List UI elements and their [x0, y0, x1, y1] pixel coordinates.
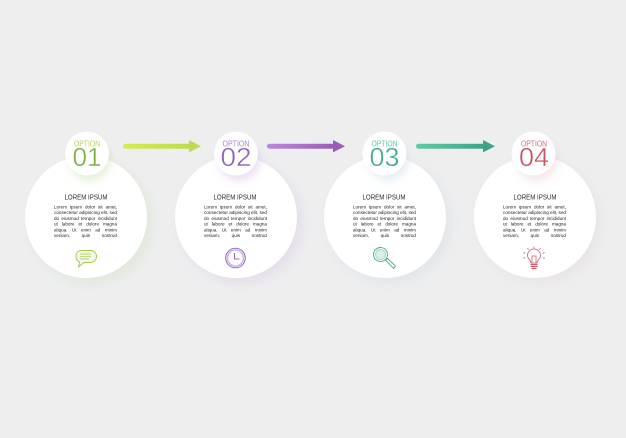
arrow: option 2 to option 3	[267, 140, 345, 152]
text block: option 2: do eiusmod tempor incididunt	[204, 216, 268, 221]
badge: option 1: 01	[72, 144, 102, 172]
text block: option 3	[353, 204, 417, 238]
badge: option 1	[65, 132, 109, 176]
badge: option 3: 03	[370, 144, 400, 172]
badge: option 2	[214, 132, 258, 176]
heading: option 4: LOREM IPSUM	[514, 194, 557, 202]
icon: speech bubble	[76, 250, 97, 267]
text block: option 1	[54, 204, 118, 238]
heading: option 1: LOREM IPSUM	[64, 194, 108, 202]
text block: option 3: ut labore et dolore magna	[353, 222, 416, 227]
icon: clock	[226, 248, 245, 268]
text block: option 1: ut labore et dolore magna	[54, 222, 117, 227]
badge: option 1: OPTION	[74, 140, 100, 148]
text block: option 3: Lorem ipsum dolor sit amet,	[353, 204, 416, 210]
heading: option 2: LOREM IPSUM	[214, 194, 257, 202]
panel: option 2	[175, 132, 301, 282]
badge: option 2: 02	[220, 144, 252, 172]
text block: option 1: veniam, quis nostrud	[54, 233, 117, 238]
icon: magnifying glass	[374, 248, 396, 268]
text block: option 4: consectetur adipiscing elit, sed	[503, 210, 566, 215]
text block: option 1: Lorem ipsum dolor sit amet,	[54, 204, 117, 210]
badge: option 4: OPTION	[521, 140, 547, 148]
text block: option 2: Lorem ipsum dolor sit amet,	[204, 204, 267, 210]
arrow: option 1 to option 2	[123, 140, 201, 152]
text block: option 1: do eiusmod tempor incididunt	[54, 216, 118, 221]
text block: option 4: do eiusmod tempor incididunt	[503, 216, 567, 221]
text block: option 2: consectetur adipiscing elit, sed	[204, 210, 267, 215]
text block: option 3: consectetur adipiscing elit, sed	[353, 210, 416, 215]
panel: option 3	[324, 132, 450, 282]
heading: option 3: LOREM IPSUM	[362, 194, 406, 202]
badge: option 4	[512, 132, 556, 176]
text block: option 4: veniam, quis nostrud	[503, 233, 566, 238]
panel: option 1	[25, 132, 151, 282]
text block: option 4	[503, 204, 567, 238]
arrow: option 3 to option 4	[416, 140, 495, 152]
text block: option 3: do eiusmod tempor incididunt	[353, 216, 417, 221]
badge: option 2: OPTION	[222, 140, 250, 148]
text block: option 4: aliqua. Ut enim ad minim	[503, 227, 566, 232]
badge: option 3: OPTION	[372, 140, 398, 148]
text block: option 4: ut labore et dolore magna	[503, 222, 566, 227]
badge: option 3	[362, 132, 406, 176]
text block: option 1: aliqua. Ut enim ad minim	[54, 227, 117, 232]
text block: option 4: Lorem ipsum dolor sit amet,	[503, 204, 566, 210]
text block: option 2	[204, 204, 268, 238]
text block: option 2: veniam, quis nostrud	[204, 233, 267, 238]
panel: option 4	[474, 132, 600, 282]
text block: option 2: ut labore et dolore magna	[204, 222, 267, 227]
text block: option 3: aliqua. Ut enim ad minim	[353, 227, 416, 232]
badge: option 4: 04	[519, 144, 549, 172]
text block: option 2: aliqua. Ut enim ad minim	[204, 227, 267, 232]
text block: option 3: veniam, quis nostrud	[353, 233, 416, 238]
icon: light bulb	[523, 246, 545, 268]
text block: option 1: consectetur adipiscing elit, sed	[54, 210, 117, 215]
